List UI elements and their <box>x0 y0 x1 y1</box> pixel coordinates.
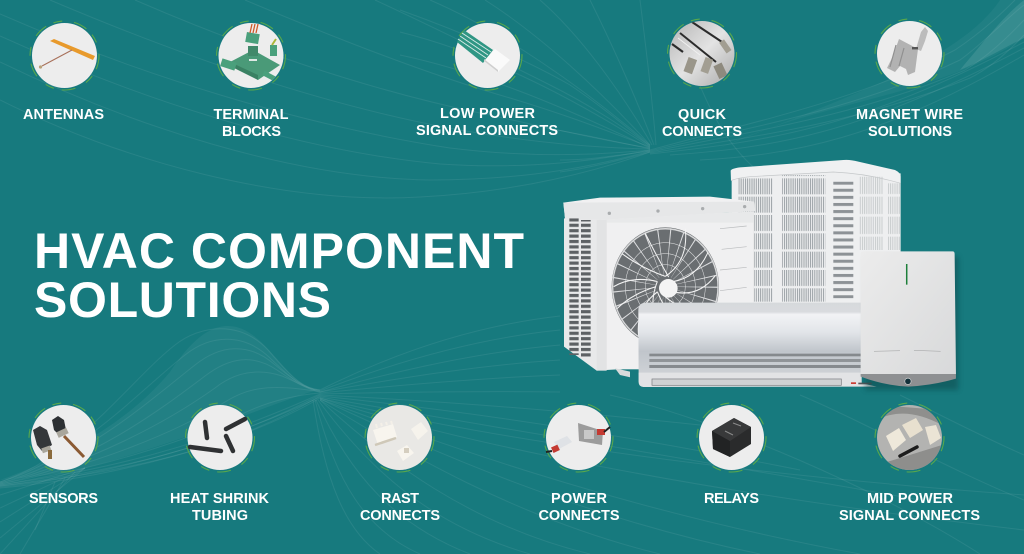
label <box>839 491 980 524</box>
label: RAST <box>381 491 419 507</box>
icon: power connector pair <box>544 403 613 472</box>
label <box>416 106 558 139</box>
label: CONNECTS <box>538 508 620 524</box>
label: LOW POWER <box>440 106 536 122</box>
label <box>856 107 963 140</box>
product: terminal blocks <box>214 21 289 140</box>
product: relays <box>697 403 766 507</box>
icon: heat shrink tubes <box>186 403 254 472</box>
title: HVAC COMPONENT <box>34 223 524 279</box>
product: rast connects <box>360 403 440 524</box>
label: RELAYS <box>704 491 759 507</box>
label: TERMINAL <box>214 107 289 123</box>
title: SOLUTIONS <box>34 272 331 328</box>
label: SIGNAL CONNECTS <box>416 123 558 139</box>
label: ANTENNAS <box>23 107 104 123</box>
lower middle line fan <box>313 316 1024 554</box>
icon: pressure sensors <box>29 403 98 472</box>
product: heat shrink tubing <box>170 403 270 524</box>
fan <box>612 227 719 346</box>
product: magnet wire solutions <box>856 19 963 140</box>
label: MID POWER <box>867 491 954 507</box>
product: power connects <box>538 403 620 524</box>
icon: mid power connectors <box>875 403 944 475</box>
top right wave band <box>650 0 1024 160</box>
label: CONNECTS <box>662 124 742 140</box>
label: SENSORS <box>29 491 98 507</box>
lower left wave <box>0 326 320 554</box>
illustration: HVAC units <box>563 160 958 390</box>
label <box>360 491 440 524</box>
icon: antenna <box>30 21 99 90</box>
label: BLOCKS <box>222 124 281 140</box>
thermostat wall panel <box>861 251 958 390</box>
label: CONNECTS <box>360 508 440 524</box>
label: SOLUTIONS <box>868 124 952 140</box>
product: antennas <box>23 21 104 123</box>
icon: magnet wire terminal <box>875 19 944 88</box>
product: mid power signal connects <box>839 403 980 524</box>
icon: rast connectors <box>365 403 434 472</box>
label: SIGNAL CONNECTS <box>839 508 980 524</box>
label <box>662 107 742 140</box>
label: QUICK <box>678 107 727 123</box>
label: HEAT SHRINK <box>170 491 270 507</box>
product: quick connects <box>662 19 742 140</box>
label <box>538 491 620 524</box>
product: low power signal connects <box>416 21 558 139</box>
icon: terminal block <box>216 21 286 90</box>
top left line fan <box>0 0 770 198</box>
label <box>170 491 270 524</box>
label: POWER <box>551 491 608 507</box>
split outdoor unit <box>563 197 755 377</box>
icon: ribbon connector <box>453 21 522 90</box>
icon: black relay <box>697 403 766 472</box>
label: MAGNET WIRE <box>856 107 963 123</box>
label: TUBING <box>192 508 248 524</box>
outdoor condenser unit <box>731 160 901 303</box>
title <box>34 223 524 328</box>
wall-mounted indoor unit <box>638 303 877 387</box>
product: sensors <box>29 403 98 507</box>
icon: quick connect terminals <box>668 19 736 88</box>
label <box>214 107 289 140</box>
